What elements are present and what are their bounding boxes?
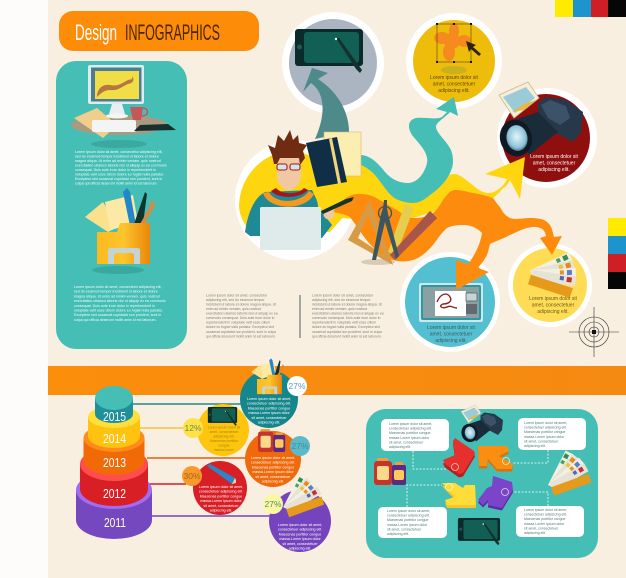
circle: drawing tablet screen: Lorem ipsum dolor sit <box>427 325 476 331</box>
bubble: teal 27%: adipiscing elit. <box>258 420 280 424</box>
bubble: red 30%: adipiscing elit. <box>210 508 232 512</box>
text block: centre column one: reprehenderit in voluptate velit esse cillum <box>206 321 270 325</box>
bubble: red 30%: 30% <box>183 471 201 481</box>
orange divider band <box>48 366 626 395</box>
callout: top left: adipiscing elit. <box>389 445 411 449</box>
icon: swatch fan <box>537 446 596 505</box>
chart: stacked timeline cylinders: 2012 <box>103 486 126 501</box>
bubble: teal 27%: Lorem ipsum dolor sit amet, <box>247 397 291 401</box>
circle: drawing tablet screen <box>400 252 500 352</box>
bubble: yellow 12%: Lorem ipsum dolor sit <box>208 426 240 430</box>
text block: centre column two: incididunt ut labore et dolore magna aliqua. Ut <box>312 302 382 306</box>
circle: vector shape: amet, consectetuer <box>433 82 476 88</box>
circle: tablet <box>282 12 384 114</box>
text block: lower panel copy: Lorem ipsum dolor sit amet, consectetur adipiscing elit, <box>74 285 162 289</box>
panel: left teal <box>56 61 187 349</box>
icon: sketchbook and paper <box>306 132 361 187</box>
arrow: red <box>443 438 475 478</box>
callout: top left: consectetuer adipiscing elit. <box>389 427 432 431</box>
bubble: purple 27%: 27% <box>264 499 282 509</box>
callout: bottom right: adipiscing elit. <box>524 531 546 535</box>
arrow: purple <box>478 476 513 510</box>
callout: bottom right: massa Lorem ipsum dolor <box>524 522 565 526</box>
text block: upper panel copy: exercitation ullamco laboris nisi ut aliquip ex ea commodo <box>75 164 167 168</box>
callout: top right: sit amet, consectetuer <box>524 439 559 443</box>
icon: folder with tools <box>85 188 155 274</box>
bubble: orange 27%: 27% <box>291 441 309 451</box>
bubble: teal 27%: sit amet, consectetuer <box>251 416 287 420</box>
arrow: slate to tablet <box>303 68 349 139</box>
text block: lower panel copy: exercitation ullamco laboris nisi ut aliquip ex ea commodo <box>74 299 166 303</box>
arrow: yellow <box>442 483 476 508</box>
bubble: purple 27%: Maecenas porttitor congue <box>279 532 321 536</box>
bubble: orange 27%: adipiscing elit. <box>262 480 284 484</box>
callout: top left: sit amet, consectetuer <box>389 440 424 444</box>
callout: bottom left <box>378 507 447 538</box>
chart: stacked timeline cylinders: 2015 <box>103 409 126 424</box>
bubble: yellow 12%: congue <box>218 444 230 448</box>
bubble: orange 27%: Lorem ipsum dolor sit amet, <box>251 456 295 460</box>
icon: jars <box>374 458 406 485</box>
text block: centre column one: enim ad minim veniam, quis nostrud <box>206 307 261 311</box>
text block: centre column one: adipiscing elit, sed do eiusmod tempor <box>206 298 265 302</box>
flow: orange <box>333 190 562 290</box>
text block: lower panel copy: culpa qui officia deserunt mollit anim id est laborum. <box>74 318 156 322</box>
callout: bottom left: Lorem ipsum dolor sit amet, <box>387 509 430 513</box>
text block: lower panel copy: voluptate velit esse cillum dolore eu fugiat nulla pariatur. <box>74 308 163 312</box>
circle: camera: Lorem ipsum dolor sit <box>530 154 579 160</box>
bubble: orange 27%: massa.Lorem ipsum dolor <box>252 470 294 474</box>
bubble: yellow 12%: adipiscing elit. <box>213 434 235 438</box>
bubble: teal 27%: 27% <box>288 381 306 391</box>
bubble: yellow 12%: massa.Lorem <box>214 448 234 452</box>
icon: desktop computer <box>71 65 176 148</box>
bubble: teal 27%: Maecenas porttitor congue <box>248 406 290 410</box>
text block: centre column one: occaecat cupidatat non proident, sunt in culpa <box>206 330 276 334</box>
text block: upper panel copy: magna aliqua. Ut enim ad minim veniam, quis nostrud <box>75 159 161 163</box>
circle: colour swatch <box>508 243 592 327</box>
icon: drawing tools <box>348 200 435 265</box>
bubble: purple 27%: consectetuer adipiscing elit. <box>278 528 322 532</box>
bubble: orange 27%: Maecenas porttitor congue <box>252 465 294 469</box>
callout: top right: Lorem ipsum dolor sit amet, <box>524 421 567 425</box>
callout: bottom right: Lorem ipsum dolor sit amet, <box>524 508 567 512</box>
bubble: red 30%: sit amet, consectetuer <box>203 504 239 508</box>
text block: upper panel copy: Lorem ipsum dolor sit amet, consectetur adipiscing elit, <box>75 150 162 154</box>
icon: camera <box>459 405 503 444</box>
bubble: purple 27%: sit amet, consectetuer <box>282 542 318 546</box>
callout: top right: Maecenas porttitor congue <box>524 430 565 434</box>
bubble: yellow 12%: Maecenas porttitor <box>210 439 239 443</box>
callout: top right: adipiscing elit. <box>524 444 546 448</box>
text block: centre column one: qui officia deserunt mollit anim id est laborum. <box>206 334 276 338</box>
callout: bottom left: Maecenas porttitor congue <box>387 518 428 522</box>
bubble: red 30%: Maecenas porttitor congue <box>200 494 242 498</box>
callout: bottom left: adipiscing elit. <box>387 532 409 536</box>
text block: centre column one: dolore eu fugiat nulla pariatur. Excepteur sint <box>206 325 274 329</box>
text block: upper panel copy: sed do eiusmod tempor incididunt ut labore et dolore <box>75 154 159 158</box>
callout: top right <box>518 418 586 450</box>
text block: centre column two: commodo consequat. Duis aute irure dolor in <box>312 316 380 320</box>
callout: top right: massa Lorem ipsum dolor <box>524 435 565 439</box>
bubble: purple 27%: adipiscing elit. <box>289 546 311 550</box>
connector lines <box>133 404 270 516</box>
bubble: orange 27%: sit amet, consectetuer <box>255 475 291 479</box>
callout: top left: Maecenas porttitor congue <box>389 431 430 435</box>
title bar <box>59 11 259 51</box>
text block: centre column two: exercitation ullamco laboris nisi ut aliquip ex ea <box>312 312 384 316</box>
callout: top left <box>381 419 449 451</box>
chart: stacked timeline cylinders: 2013 <box>103 455 126 470</box>
designer figure <box>245 130 354 250</box>
circle: drawing tablet screen: amet, consectetuer <box>430 332 473 338</box>
text block: centre column one: exercitation ullamco laboris nisi ut aliquip ex ea <box>206 312 278 316</box>
callout: bottom left: consectetuer adipiscing elit. <box>387 514 430 518</box>
circle: camera: amet, consectetuer <box>533 160 576 166</box>
callout: bottom right: sit amet, consectetuer <box>524 526 559 530</box>
text block: centre column two: adipiscing elit, sed do eiusmod tempor <box>312 298 371 302</box>
circle: camera: adipiscing elit. <box>538 167 570 173</box>
icon: tablet <box>458 518 500 545</box>
text block: centre column two: occaecat cupidatat non proident, sunt in culpa <box>312 330 382 334</box>
flow: teal <box>352 97 458 203</box>
circle: drawing tablet screen: adipiscing elit. <box>435 338 467 344</box>
text block: lower panel copy: Excepteur sint occaecat cupidatat non proident, sunt in <box>74 313 161 317</box>
callout: top left: Lorem ipsum dolor sit amet, <box>389 422 432 426</box>
bubble: orange 27% <box>245 429 310 487</box>
bubble: purple 27%: massa.Lorem ipsum dolor <box>279 537 321 541</box>
bubble: orange 27%: consectetuer adipiscing elit. <box>251 461 295 465</box>
bubble: purple 27% <box>263 471 331 552</box>
text block: centre column one: incididunt ut labore et dolore magna aliqua. Ut <box>206 302 276 306</box>
circle: colour swatch: amet, consectetuer <box>532 302 575 308</box>
bubble: red 30% <box>182 461 247 515</box>
text block: centre column two: Lorem ipsum dolor sit amet, consectetur <box>312 294 374 298</box>
colour bar: top <box>555 0 626 17</box>
text block: lower panel copy: consequat. Duis aute irure dolor in reprehenderit in <box>74 304 155 308</box>
bubble: purple 27%: Lorem ipsum dolor sit amet, <box>278 523 322 527</box>
text block: centre column two: dolore eu fugiat nulla pariatur. Excepteur sint <box>312 325 380 329</box>
bubble: red 30%: Lorem ipsum dolor sit amet, <box>199 485 243 489</box>
chart: stacked timeline cylinders: 2011 <box>104 515 126 530</box>
text block: upper panel copy: voluptate velit esse cillum dolore eu fugiat nulla pariatur. <box>75 172 164 176</box>
bubble: yellow 12% <box>183 404 249 456</box>
bubble: teal 27%: massa.Lorem ipsum dolor <box>248 411 290 415</box>
title bar: INFOGRAPHICS <box>125 20 220 45</box>
callout: bottom left: sit amet, consectetuer <box>387 527 422 531</box>
text block: centre column two: qui officia deserunt mollit anim id est laborum. <box>312 334 382 338</box>
text block: lower panel copy: magna aliqua. Ut enim ad minim veniam, quis nostrud <box>74 294 160 298</box>
bubble: red 30%: consectetuer adipiscing elit. <box>199 490 243 494</box>
text block: lower panel copy: sed do eiusmod tempor incididunt ut labore et dolore <box>74 290 158 294</box>
arrow: orange <box>478 446 513 472</box>
title bar: Design <box>75 20 117 45</box>
colour bar: right <box>608 218 626 289</box>
callout: top right: consectetuer adipiscing elit. <box>524 426 567 430</box>
text block: centre column two: enim ad minim veniam, quis nostrud <box>312 307 367 311</box>
bubble: teal 27%: consectetuer adipiscing elit. <box>247 402 291 406</box>
text block: upper panel copy: culpa qui officia deserunt mollit anim id est laborum. <box>75 182 157 186</box>
callout: top left: massa Lorem ipsum dolor <box>389 436 430 440</box>
callout: bottom right <box>516 506 584 537</box>
dashed connectors <box>407 450 548 507</box>
bubble: yellow 12%: 12% <box>184 423 202 433</box>
callout: bottom right: Maecenas porttitor congue <box>524 517 565 521</box>
text block: centre column one: Lorem ipsum dolor sit amet, consectetur <box>206 294 268 298</box>
callout: bottom right: consectetuer adipiscing elit. <box>524 513 567 517</box>
circle: vector shape <box>406 13 502 109</box>
icon: registration target <box>569 307 619 357</box>
circle: colour swatch: adipiscing elit. <box>537 309 569 315</box>
chart: stacked timeline cylinders <box>76 386 152 539</box>
text block: upper panel copy: Excepteur sint occaecat cupidatat non proident, sunt in <box>75 177 162 181</box>
circle: vector shape: adipiscing elit. <box>438 88 470 94</box>
chart: stacked timeline cylinders: 2014 <box>103 431 126 446</box>
circle: vector shape: Lorem ipsum dolor sit <box>430 75 479 81</box>
text block: centre column two: reprehenderit in voluptate velit esse cillum <box>312 321 376 325</box>
flow: yellow <box>335 157 525 222</box>
text block: upper panel copy: consequat. Duis aute irure dolor in reprehenderit in <box>75 168 156 172</box>
circle: designer backing <box>235 140 355 260</box>
bubble: teal 27% <box>240 358 307 428</box>
text block: centre column one: commodo consequat. Duis aute irure dolor in <box>206 316 274 320</box>
circle: camera <box>496 82 597 188</box>
callout: bottom left: massa Lorem ipsum dolor <box>387 523 428 527</box>
panel: right teal process <box>366 405 598 558</box>
circle: colour swatch: Lorem ipsum dolor sit <box>529 296 578 302</box>
bubble: yellow 12%: amet, consectetuer <box>210 430 239 434</box>
bubble: red 30%: massa.Lorem ipsum dolor <box>200 499 242 503</box>
